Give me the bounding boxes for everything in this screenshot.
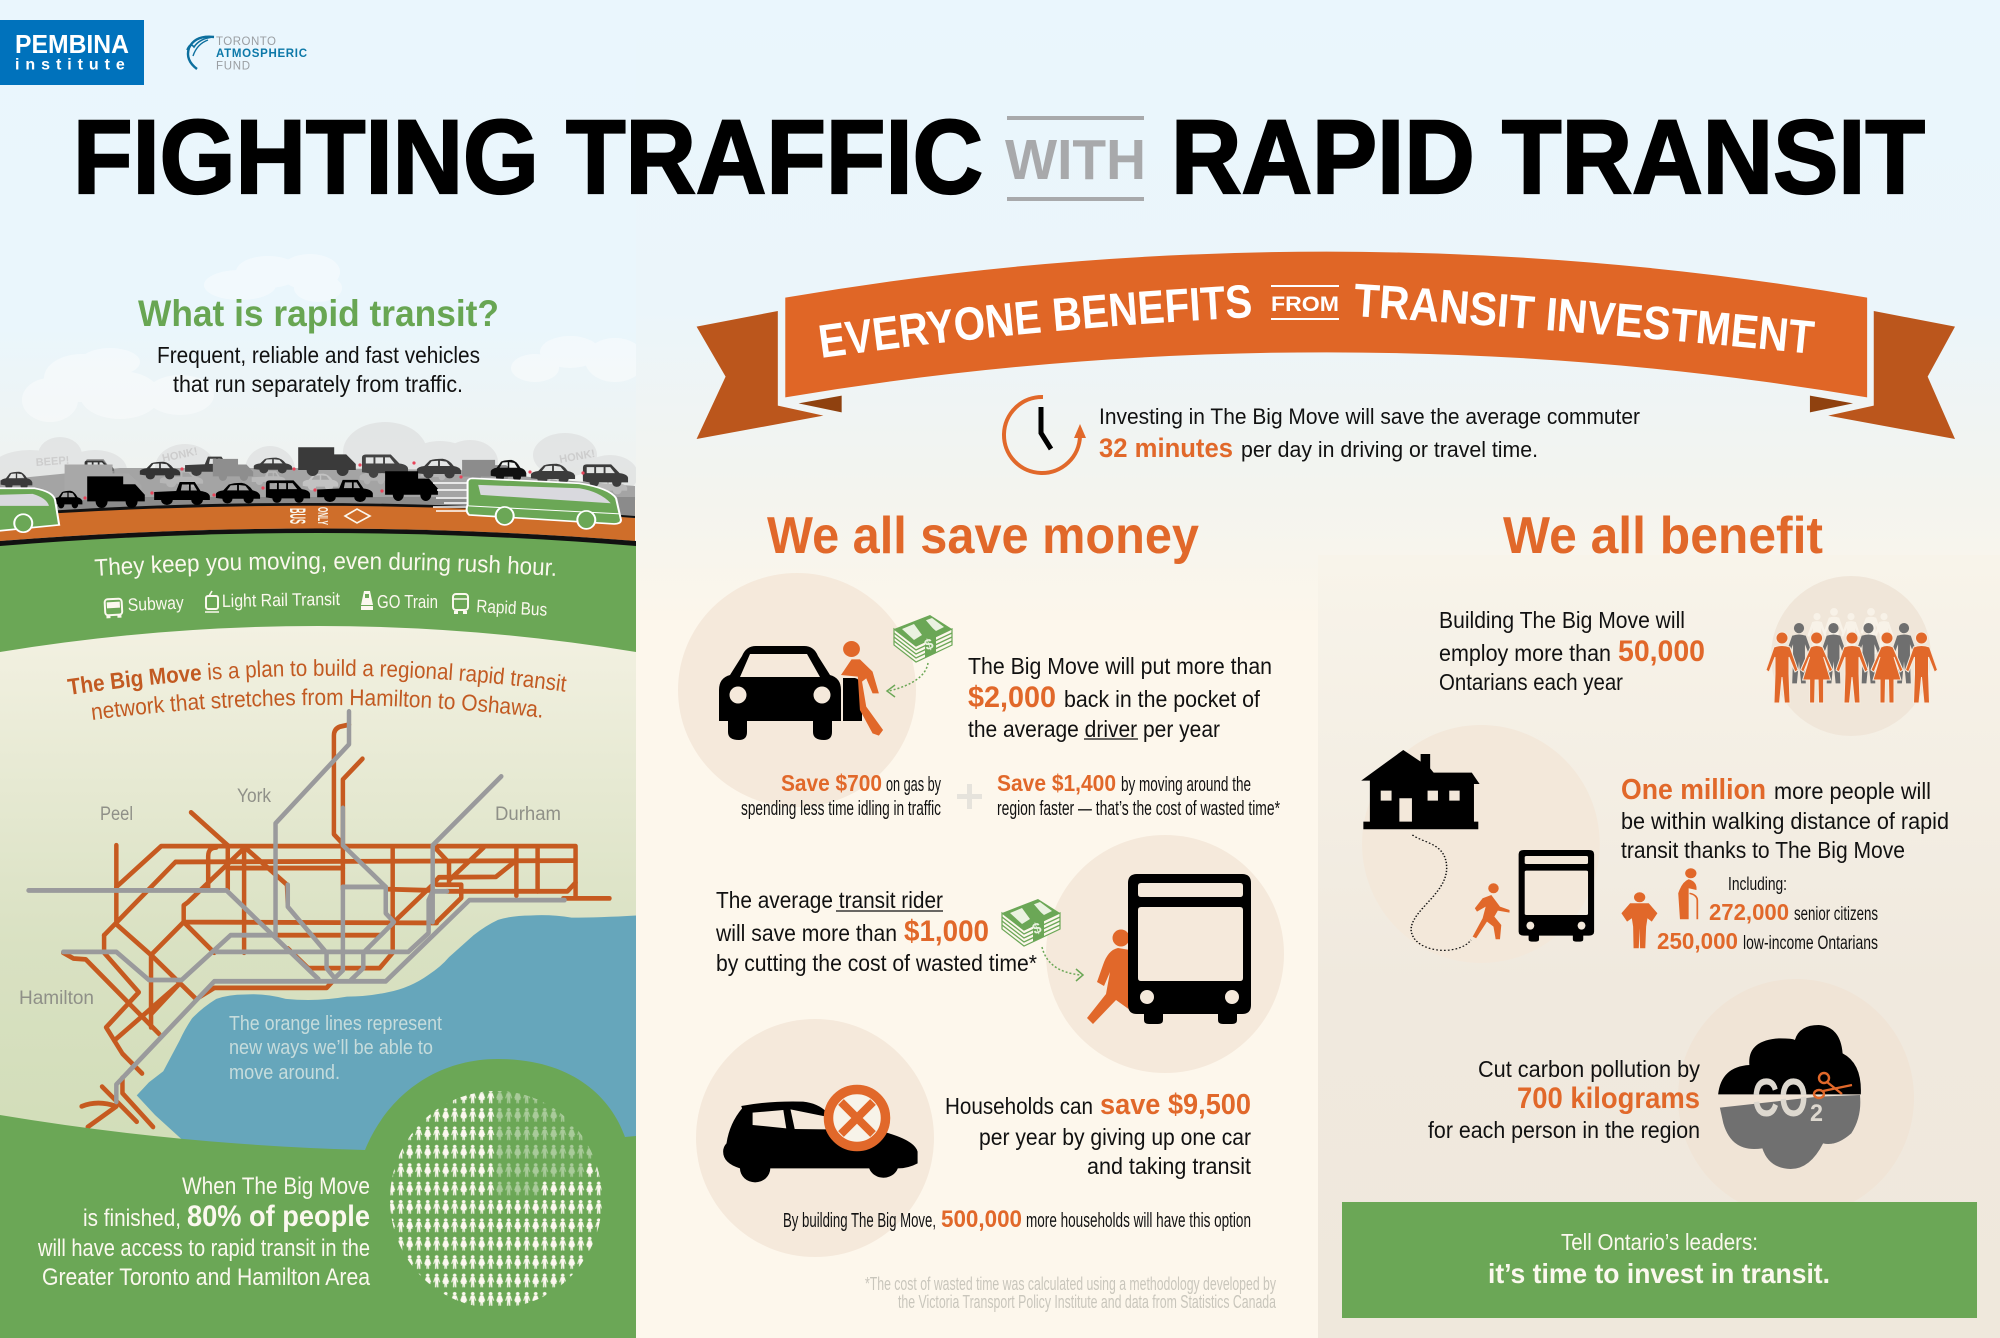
text: employ 50000: 50,000 — [1618, 635, 1705, 668]
logo: Pembina Institute: PEMBINA — [15, 29, 129, 59]
transit modes legend — [105, 589, 548, 620]
logo: Pembina Institute: institute — [15, 56, 129, 74]
text: households save 9500: Households can — [945, 1093, 1093, 1119]
text: transit rider 1000 — [715, 887, 1037, 976]
footnote — [865, 1274, 1277, 1312]
icon: car side — [723, 1101, 918, 1182]
call to action — [1342, 1202, 1977, 1318]
text: 32 minutes — [1099, 404, 1640, 463]
call to action: Tell Ontario’s leaders: — [1561, 1229, 1758, 1255]
banner: everyone benefits: FROM — [1271, 293, 1339, 316]
logo: Pembina Institute — [0, 20, 144, 85]
panel: what is rapid transit — [0, 254, 636, 1338]
clouds — [55, 254, 635, 362]
text: 80 percent of people: 80% of people — [187, 1200, 370, 1233]
lake — [136, 915, 636, 1150]
text: save 1400: by moving around the — [1121, 774, 1251, 796]
text: save 1400: Save $1,400 — [997, 770, 1116, 796]
transit modes legend: Rapid Bus — [476, 596, 548, 620]
icon: light rail — [205, 591, 219, 612]
map labels: York — [237, 786, 271, 807]
logo: Toronto Atmospheric Fund: ATMOSPHERIC — [216, 48, 307, 60]
text: rapid transit definition: that run separately from traffic. — [173, 371, 463, 397]
lake caption: move around. — [229, 1062, 340, 1084]
beep and honk words: HONK! — [161, 446, 199, 465]
front traffic — [54, 471, 438, 508]
text: one million: One million — [1621, 774, 1766, 806]
CO2 label: CO — [1752, 1068, 1808, 1128]
text: 2000 back in pocket: the average driver per year — [968, 716, 1220, 742]
logo: Toronto Atmospheric Fund: FUND — [216, 60, 250, 72]
text: 500000 households: more households will have this option — [1026, 1210, 1251, 1232]
text: save 700: spending less time idling in traffic — [741, 798, 941, 820]
text: the big move — [67, 659, 567, 720]
text: one million: transit thanks to The Big Move — [1621, 837, 1905, 863]
text: save 700 — [741, 770, 941, 820]
arrow: money to driver — [887, 663, 928, 697]
text: including seniors and low-income: senior citizens — [1794, 904, 1878, 925]
heading: we all benefit: We all benefit — [1503, 507, 1823, 565]
panel: what is rapid transit: BUS — [285, 508, 310, 524]
call to action: it’s time to invest in transit. — [1488, 1258, 1830, 1289]
text: 32 minutes: Investing in The Big Move will save the average commuter — [1099, 404, 1640, 429]
banner: everyone benefits: TRANSIT INVESTMENT — [1355, 284, 1816, 353]
green bottom panel — [0, 1059, 636, 1338]
panel: what is rapid transit: ONLY — [314, 507, 331, 525]
beep and honk words: BEEP! — [35, 455, 70, 469]
text: households save 9500: save $9,500 — [1100, 1089, 1251, 1121]
text: employ 50000: Ontarians each year — [1439, 669, 1623, 695]
logo: Toronto Atmospheric Fund — [187, 36, 307, 72]
text: save 700: on gas by — [886, 774, 941, 796]
icon: CO2 cloud with scissors — [1718, 979, 1861, 1169]
icon: rapid bus — [453, 594, 468, 614]
map labels: Hamilton — [19, 988, 94, 1009]
text: 2000 back in pocket — [968, 653, 1272, 742]
backdrop circle — [1046, 835, 1284, 1073]
icon: money — [894, 615, 952, 662]
text: the big move: The Big Move is a plan to build a regional rapid transit — [67, 659, 567, 694]
icon: crowd of workers — [1766, 576, 1938, 736]
grey middle row — [1785, 623, 1918, 683]
icon: money — [1002, 899, 1060, 946]
logo: Toronto Atmospheric Fund: TORONTO — [216, 36, 276, 48]
text: employ 50000 — [1439, 607, 1705, 695]
backdrop circle — [1362, 725, 1600, 963]
grey existing lines — [29, 711, 565, 1102]
icon: house — [1361, 750, 1480, 829]
heading: we all save money: We all save money — [767, 507, 1199, 565]
banner text: EVERYONE BENEFITS — [819, 285, 1251, 358]
backdrop circle — [678, 573, 916, 807]
text: rapid transit definition — [157, 342, 480, 397]
icon: bus — [1519, 850, 1594, 942]
text: 80 percent of people: will have access to rapid transit in the — [37, 1235, 370, 1262]
map labels: Peel — [100, 804, 133, 825]
icon: clock — [1004, 397, 1086, 473]
transit modes legend: GO Train — [377, 592, 438, 612]
icons: senior and low-income person — [1621, 868, 1697, 948]
orange new lines — [63, 725, 609, 1127]
icon: plus — [957, 784, 982, 809]
pale back row — [1807, 608, 1894, 656]
icon: bus front — [1128, 874, 1251, 1024]
text: transit rider 1000: by cutting the cost of wasted time* — [716, 950, 1037, 976]
title: WITH — [1005, 128, 1146, 192]
icon: car front — [719, 646, 862, 740]
orange front row — [1766, 632, 1938, 703]
text: 500000 households — [783, 1206, 1251, 1233]
icon: driver — [841, 641, 883, 736]
transit map — [29, 711, 609, 1127]
backdrop circle — [1771, 576, 1931, 736]
text: the big move: network that stretches from Hamilton to Oshawa. — [92, 688, 542, 720]
text: 80 percent of people — [37, 1173, 371, 1291]
beep and honk words: HONK! — [558, 448, 596, 466]
icon: rider — [1087, 930, 1130, 1024]
text: cut carbon — [1428, 1056, 1700, 1143]
text: households save 9500: and taking transit — [1087, 1153, 1252, 1179]
beep and honk words — [36, 447, 594, 466]
text: 500000 households: 500,000 — [941, 1206, 1022, 1233]
text: transit rider 1000: The average transit rider — [716, 887, 943, 913]
people chart: 80 percent — [390, 1091, 602, 1306]
text: including seniors and low-income: 250,000 — [1657, 928, 1738, 954]
text: 2000 back in pocket: back in the pocket of — [1064, 686, 1261, 712]
panel: giving up a car — [696, 1019, 934, 1257]
text: including seniors and low-income: Including: — [1728, 874, 1787, 894]
text: including seniors and low-income — [1657, 874, 1878, 954]
lake caption: new ways we’ll be able to — [229, 1037, 433, 1059]
exhaust clouds — [0, 422, 636, 486]
icon: cross mark — [828, 1090, 886, 1146]
text: 2000 back in pocket: $2,000 — [968, 681, 1056, 714]
icon: money: $ — [1030, 919, 1044, 938]
text: households save 9500: per year by giving up one car — [979, 1124, 1251, 1150]
text: save 1400: region faster — that’s the cost of wasted time* — [997, 798, 1280, 820]
panel: walking distance — [1361, 725, 1600, 963]
text: one million — [1621, 774, 1949, 863]
panel: driver savings — [678, 573, 952, 807]
land and map background — [0, 626, 636, 1139]
backdrop circle — [1762, 979, 1830, 986]
text: households save 9500 — [945, 1089, 1252, 1179]
icon: walker — [1473, 883, 1510, 939]
back traffic — [1, 447, 628, 500]
left green bus — [0, 488, 59, 532]
icon: GO train — [361, 591, 373, 610]
icon: money: $ — [922, 635, 936, 654]
scissors — [1814, 1073, 1852, 1098]
text: one million: be within walking distance of rapid — [1621, 808, 1949, 834]
text: 80 percent of people: When The Big Move — [182, 1173, 370, 1200]
text: save 700: Save $700 — [781, 770, 882, 796]
text: 2000 back in pocket: The Big Move will put more than — [968, 653, 1272, 679]
text: 32 minutes: per day in driving or travel time. — [1241, 437, 1538, 462]
footnote: the Victoria Transport Policy Institute and data from Statistics Canada — [898, 1292, 1277, 1312]
text: cut carbon: Cut carbon pollution by — [1478, 1056, 1700, 1082]
icon: subway — [105, 599, 123, 618]
icon: CO2 cloud with scissors: 2 — [1810, 1100, 1823, 1127]
road — [0, 468, 635, 541]
map labels: Durham — [495, 804, 561, 825]
speed lines — [433, 483, 467, 511]
text: employ 50000: Building The Big Move will — [1439, 607, 1685, 633]
footnote: *The cost of wasted time was calculated using a methodology developed by — [865, 1274, 1276, 1294]
text: including seniors and low-income: low-income Ontarians — [1743, 933, 1878, 954]
text: 80 percent of people: Greater Toronto and Hamilton Area — [42, 1264, 371, 1291]
lake caption — [229, 1015, 442, 1079]
text: 500000 households: By building The Big Move, — [783, 1210, 936, 1232]
lake caption: The orange lines represent — [229, 1013, 442, 1035]
right green bus — [467, 478, 621, 529]
cloud halves — [1718, 1025, 1861, 1169]
text: one million: more people will — [1774, 778, 1931, 804]
title — [73, 99, 1925, 216]
text: transit rider 1000: $1,000 — [904, 915, 989, 948]
title: RAPID TRANSIT — [1171, 99, 1925, 216]
title: FIGHTING TRAFFIC — [73, 99, 983, 216]
transit modes legend: Light Rail Transit — [222, 589, 340, 611]
text: transit rider 1000: will save more than — [715, 920, 897, 946]
panel: transit rider savings — [1002, 835, 1284, 1073]
ribbon shapes — [697, 252, 1955, 439]
arrow: money to rider — [1042, 947, 1083, 981]
text: rapid transit definition: Frequent, reliable and fast vehicles — [157, 342, 480, 368]
banner: everyone benefits — [696, 252, 1955, 439]
text: keep you moving: They keep you moving, even during rush hour. — [94, 552, 555, 579]
text: save 1400 — [997, 770, 1280, 820]
green band — [0, 528, 636, 546]
text: 32 minutes: 32 minutes — [1099, 433, 1233, 463]
text: cut carbon: for each person in the region — [1428, 1117, 1700, 1143]
text: 80 percent of people: is finished, — [83, 1205, 181, 1232]
bus lane marking — [285, 507, 370, 525]
text: including seniors and low-income: 272,000 — [1709, 899, 1789, 925]
map labels — [19, 786, 561, 1009]
heading: what is rapid transit: What is rapid transit? — [138, 293, 499, 334]
text: employ 50000: employ more than — [1439, 640, 1611, 666]
dotted walking route — [1411, 835, 1471, 950]
transit modes legend: Subway — [127, 593, 184, 615]
tail lights — [83, 461, 585, 500]
text: cut carbon: 700 kilograms — [1517, 1082, 1700, 1115]
backdrop circle — [696, 1019, 934, 1257]
